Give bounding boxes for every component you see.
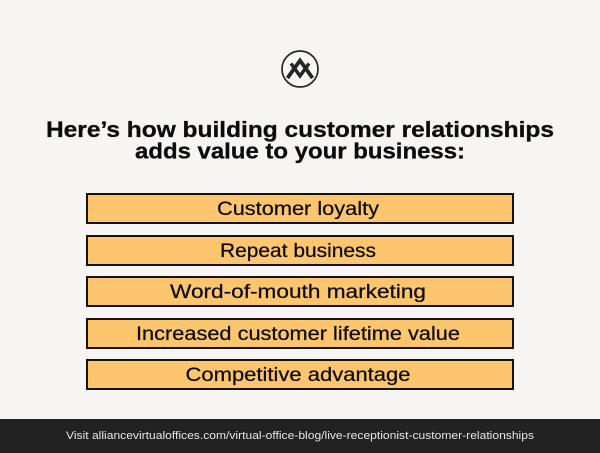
list item: customer loyalty: Customer loyalty bbox=[217, 198, 379, 220]
list item: competitive advantage: Competitive advantage bbox=[186, 364, 410, 386]
list item: increased customer lifetime value bbox=[87, 319, 513, 348]
list item: customer loyalty bbox=[87, 194, 513, 223]
list item: increased customer lifetime value: Increased customer lifetime value bbox=[136, 323, 460, 345]
title: Here’s how building customer relationships bbox=[46, 117, 554, 142]
list item: word-of-mouth marketing: Word-of-mouth marketing bbox=[170, 281, 426, 303]
title bbox=[46, 117, 554, 164]
title: adds value to your business: bbox=[135, 138, 465, 164]
list item: word-of-mouth marketing bbox=[87, 277, 513, 306]
footer bar bbox=[0, 419, 600, 453]
list item: repeat business: Repeat business bbox=[220, 240, 376, 262]
list item: competitive advantage bbox=[87, 360, 513, 389]
footer bar: Visit alliancevirtualoffices.com/virtual-office-blog/live-receptionist-customer-relationships bbox=[66, 430, 535, 442]
icon: mountain logo bbox=[282, 51, 318, 87]
list item: repeat business bbox=[87, 236, 513, 265]
